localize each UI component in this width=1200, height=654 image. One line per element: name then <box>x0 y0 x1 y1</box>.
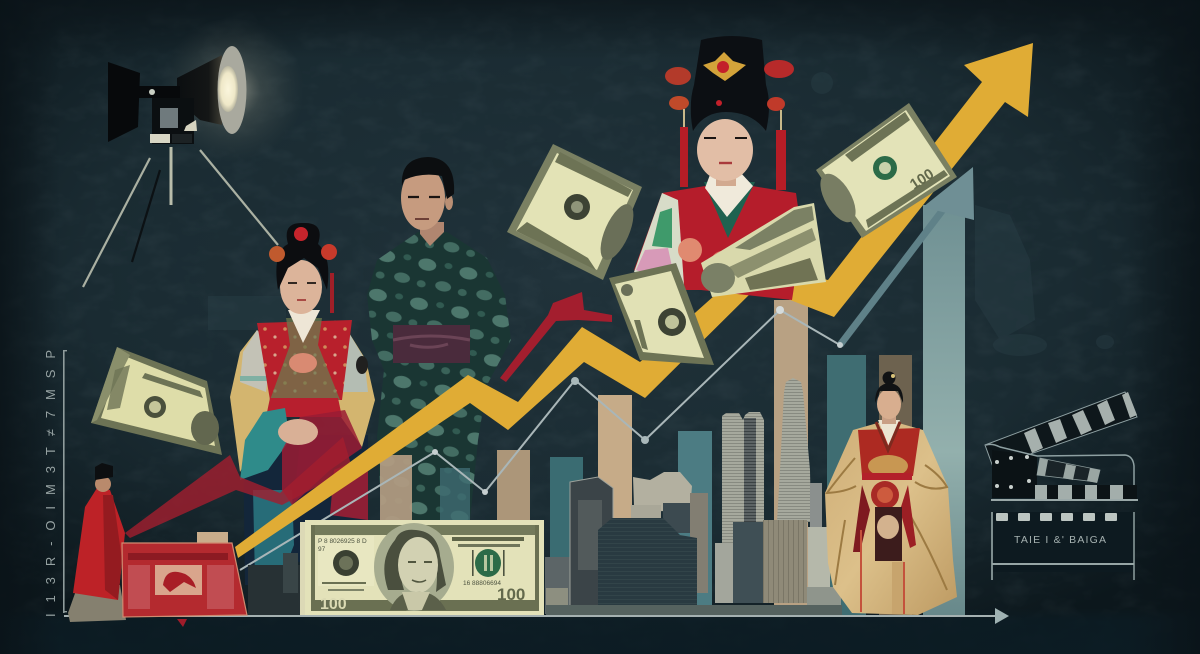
lower floating dollar bill <box>609 263 714 365</box>
large hundred dollar bill: 100 <box>320 596 347 613</box>
bar chart <box>380 205 965 616</box>
standing man in green robe <box>367 157 511 520</box>
right floating dollar bill <box>813 103 957 238</box>
large hundred dollar bill <box>300 520 544 615</box>
yellow rising arrow <box>235 43 1033 558</box>
large hundred dollar bill: 100 <box>497 585 525 604</box>
large hundred dollar bill: 16 88806694 <box>463 580 501 587</box>
small figure in red robe <box>68 463 126 622</box>
large hundred dollar bill: 97 <box>318 546 326 553</box>
upper floating dollar bill <box>507 144 642 280</box>
clapperboard icon <box>985 392 1138 580</box>
left woman in embroidered dress <box>230 223 375 585</box>
cluster of dollar bills <box>701 203 826 297</box>
left floating dollar bill <box>91 347 222 455</box>
left axis with rotated labels: I13R-OIM3T≠7MSP <box>43 350 58 617</box>
white trend line with gray arrow <box>240 167 974 570</box>
faint background sketches <box>208 72 1114 356</box>
emperor in golden robe <box>825 372 957 615</box>
red secondary arrow <box>125 292 612 538</box>
spotlight on tripod <box>83 18 304 287</box>
city skyline <box>248 378 842 615</box>
clapperboard icon: TAIE I &' BAIGA <box>1014 534 1106 546</box>
large hundred dollar bill: P 8 8026925 8 D <box>318 538 367 545</box>
bottom axis with arrowhead <box>64 608 1009 624</box>
right floating dollar bill: 100 <box>907 165 937 193</box>
red banknote <box>122 532 247 627</box>
central woman with tall headdress <box>634 36 802 300</box>
